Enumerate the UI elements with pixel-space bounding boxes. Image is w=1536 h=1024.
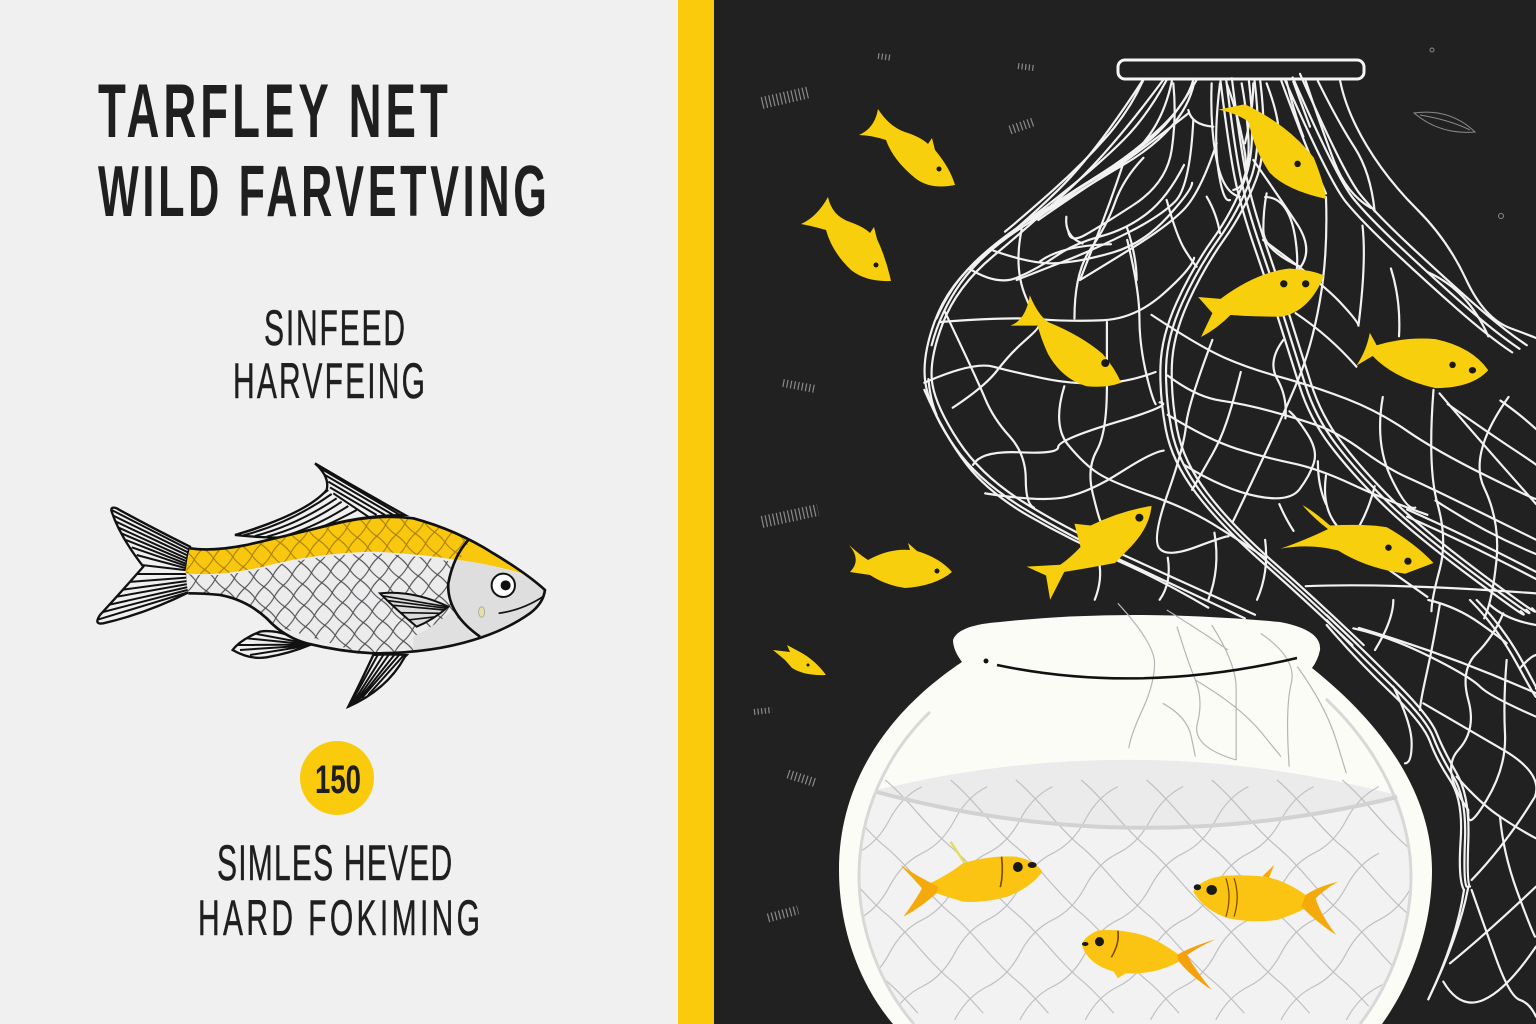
yellow fish swimming free, small: [849, 543, 952, 588]
fish left of net: [1010, 295, 1121, 387]
subtitle text block: HARVFEING: [233, 353, 425, 409]
water body: [859, 790, 1411, 1024]
water surface: [877, 760, 1397, 827]
caption text block: SIMLES HEVED: [217, 835, 452, 891]
net fan below the hoop: [1005, 80, 1310, 280]
panel: left light background: [0, 0, 678, 1024]
gill line: [448, 540, 480, 637]
fish centre: [1198, 268, 1324, 337]
subtitle text block: SINFEED: [264, 300, 405, 356]
dorsal fin: [235, 463, 405, 538]
fish bottom right: [1281, 505, 1433, 574]
yellow fish swimming free, upper left: [859, 109, 955, 186]
goldfish left: [900, 842, 1042, 917]
yellow fish swimming free, left: [801, 197, 891, 281]
hoop of the net: [1118, 60, 1364, 79]
anal fin: [348, 654, 407, 707]
inner glass outline right: [1326, 699, 1411, 1024]
pectoral fin: [380, 593, 448, 627]
panel: right dark background: [714, 0, 1536, 1024]
panel: yellow divider band: [678, 0, 714, 1024]
subtitle text block: [233, 300, 425, 409]
yellow fish swimming free, tiny: [773, 645, 826, 675]
inner glass outline left: [859, 712, 930, 1024]
goldfish in the bowl: [900, 842, 1338, 990]
net inside the bowl: [860, 780, 1409, 1020]
badge: number 150: 150: [315, 758, 361, 802]
tail fin: [97, 508, 190, 624]
caption text block: [198, 835, 480, 946]
eye: [492, 574, 515, 597]
title: TARFLEY NET: [98, 69, 448, 154]
goldfish right: [1193, 865, 1338, 935]
net strands beside the bowl: [1327, 600, 1536, 1017]
fish right: [1356, 333, 1488, 388]
goldfish bottom: [1082, 930, 1216, 990]
icon: detailed fish illustration: [97, 463, 545, 707]
badge: number 150: [300, 741, 374, 815]
fishing net: [924, 74, 1536, 1017]
rim dot: [984, 658, 988, 664]
water line: [877, 792, 1397, 828]
rim line: [997, 658, 1297, 678]
yellow fish caught in the net: [1010, 104, 1488, 600]
title: [98, 69, 547, 232]
pelvic fin: [233, 631, 310, 658]
mouth: [499, 596, 544, 613]
fish bottom centre: [1027, 506, 1152, 600]
bowl glass: [839, 615, 1432, 1024]
fish top: [1218, 104, 1326, 199]
title: WILD FARVETVING: [98, 151, 547, 232]
net mesh and strands: [924, 74, 1536, 693]
background sketches of tiny fish: [754, 48, 1504, 918]
fish bowl: [839, 602, 1432, 1024]
gill spot: [479, 607, 485, 617]
caption text block: HARD FOKIMING: [198, 890, 480, 946]
body: [185, 517, 545, 657]
net strands above the water: [1118, 603, 1346, 773]
